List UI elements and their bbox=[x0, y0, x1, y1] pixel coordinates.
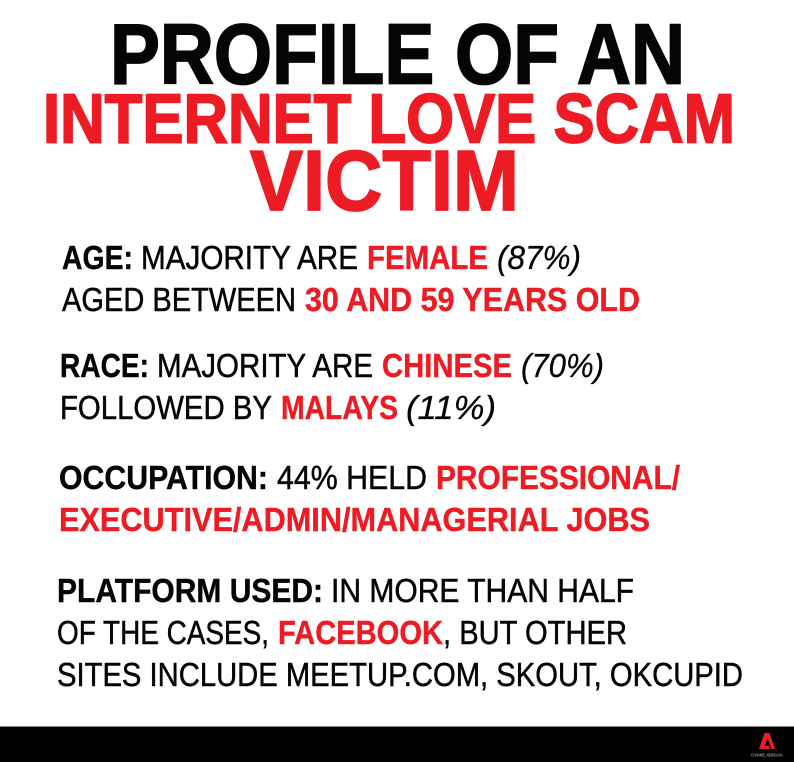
text block: age bbox=[62, 239, 640, 318]
title bbox=[43, 8, 735, 229]
icon: channel logo bbox=[751, 733, 783, 758]
text block: platform used: FACEBOOK bbox=[278, 614, 443, 651]
text block: occupation: PROFESSIONAL/ bbox=[436, 459, 680, 496]
text block: race: RACE: bbox=[60, 347, 149, 384]
text block: age: FEMALE bbox=[367, 239, 488, 276]
text block: race: CHINESE bbox=[382, 347, 512, 384]
title: VICTIM bbox=[250, 134, 519, 229]
text block: race: (70%) bbox=[521, 347, 604, 384]
text block: race: MAJORITY ARE bbox=[157, 347, 373, 384]
text block: platform used: , BUT OTHER bbox=[443, 614, 627, 651]
text block: race: (11%) bbox=[406, 389, 496, 426]
text block: race: FOLLOWED BY bbox=[60, 389, 272, 426]
text block: age: 30 AND 59 YEARS OLD bbox=[305, 281, 640, 318]
text block: occupation: OCCUPATION: bbox=[59, 459, 268, 496]
text block: occupation: EXECUTIVE/ADMIN/MANAGERIAL JOBS bbox=[59, 501, 650, 538]
text block: platform used bbox=[57, 572, 743, 693]
text block: platform used: IN MORE THAN HALF bbox=[331, 572, 634, 609]
title: PROFILE OF AN bbox=[110, 8, 685, 102]
text block: platform used: PLATFORM USED: bbox=[57, 572, 323, 609]
footer bar bbox=[0, 726, 794, 762]
text block: age: MAJORITY ARE bbox=[141, 239, 358, 276]
text block: age: (87%) bbox=[497, 239, 581, 276]
text block: occupation bbox=[59, 459, 680, 538]
text block: race bbox=[60, 347, 604, 426]
text block: age: AGED BETWEEN bbox=[62, 281, 296, 318]
text block: platform used: OF THE CASES, bbox=[57, 614, 269, 651]
text block: occupation: 44% HELD bbox=[277, 459, 427, 496]
text block: race: MALAYS bbox=[281, 389, 398, 426]
text block: age: AGE: bbox=[62, 239, 133, 276]
